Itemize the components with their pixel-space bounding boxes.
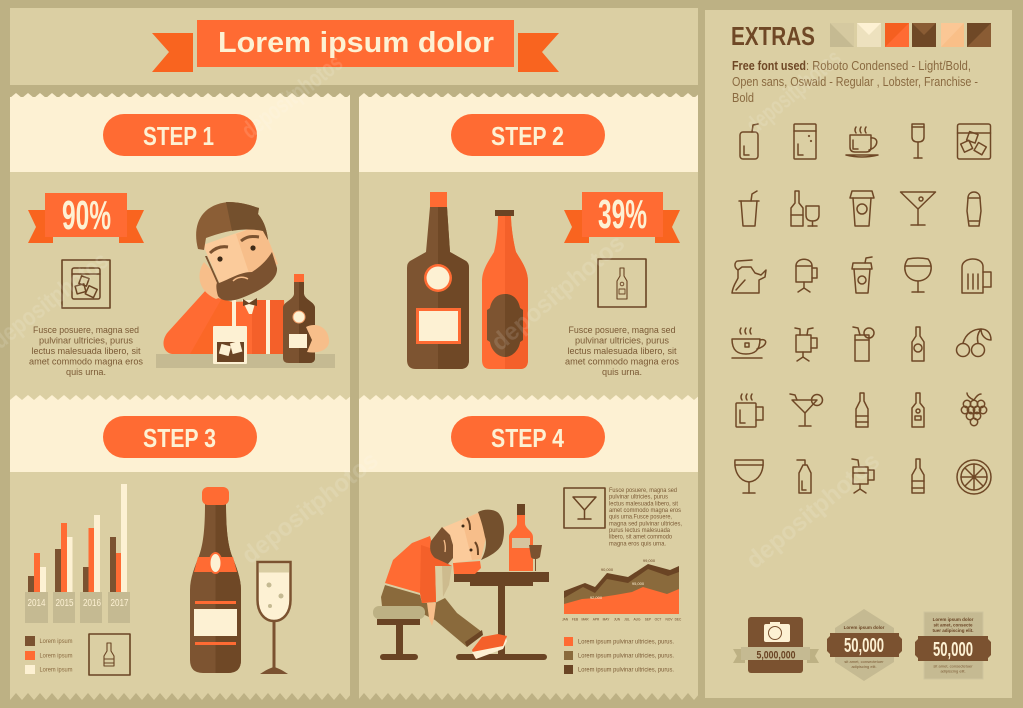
step 1 text block: Fusce posuere, magna sed (33, 325, 139, 335)
icon: beer mug (962, 259, 991, 293)
watermark: depositphotos (236, 446, 384, 570)
39% ribbon (564, 191, 680, 243)
badge: 5,000,000 camera (733, 617, 819, 673)
90% ribbon: 90% (62, 192, 111, 238)
bar chart legend: Lorem ipsum (40, 668, 72, 674)
step 1 text block (29, 325, 143, 377)
area chart legend: Lorem ipsum pulvinar ultricies, purus. (578, 668, 674, 674)
step 4 text block: purus lectus malesuada (609, 528, 671, 534)
step 2 text block (565, 325, 679, 377)
area chart legend: Lorem ipsum pulvinar ultricies, purus. (578, 654, 674, 660)
area chart: 90,000 (601, 567, 614, 572)
step 1 text block: lectus malesuada libero, sit (32, 346, 141, 356)
badge: rectangular 50,000: Lorem ipsum dolor (933, 617, 974, 622)
badge: rectangular 50,000: adipiscing elit. (940, 668, 966, 674)
icon: wine glass (905, 258, 931, 292)
area chart legend: Lorem ipsum pulvinar ultricies, purus. (578, 640, 674, 646)
title banner (152, 20, 559, 72)
font credit text: Open sans, Oswald - Regular , Lobster, Franchise - (732, 75, 978, 89)
badge: rectangular 50,000: tuer adipiscing elit. (932, 628, 974, 633)
area chart: JAN (562, 618, 569, 622)
icon: cocktail with citrus (790, 394, 822, 426)
icon box: martini (564, 488, 605, 528)
bar chart 2014-2017 (25, 484, 130, 623)
step 4 text block: libero, sit amet commodo (609, 535, 673, 541)
icon: beer glass (967, 192, 981, 226)
bar chart 2014-2017: 2014 (28, 598, 46, 609)
badge: rectangular 50,000 (915, 612, 991, 679)
area chart: JUN (614, 618, 621, 622)
illustration: champagne flute (258, 562, 290, 674)
bar chart 2014-2017: 2016 (83, 598, 101, 609)
step 2 heading pill (451, 114, 605, 156)
step 2 text block: pulvinar ultricies, purus (575, 336, 670, 346)
icon: takeaway cup (850, 191, 874, 226)
step 1 text block: amet commodo magna eros (29, 356, 143, 366)
icon box: small bottle (89, 634, 130, 675)
bar chart legend (25, 636, 72, 674)
step 2 text block: Fusce posuere, magna sed (568, 325, 676, 335)
step 4 text block: magna eros quis urna. (609, 541, 666, 547)
area chart legend (564, 637, 674, 674)
area chart: APR (593, 618, 600, 622)
icon: large wine glass (735, 460, 763, 493)
area chart: JUL (624, 618, 630, 622)
step 1 heading pill: STEP 1 (143, 121, 214, 151)
badge: 5,000,000 camera: 5,000,000 (756, 650, 796, 662)
icon: martini (900, 192, 936, 225)
illustration: champagne bottle (190, 487, 241, 673)
icon: bottle (856, 393, 868, 427)
step 1 text block: quis urna. (66, 367, 106, 377)
badge: rectangular 50,000: sit amet, consecte (933, 622, 973, 628)
font credit text: Bold (732, 91, 754, 105)
area chart: OCT (655, 618, 661, 622)
icon: beer bottle (912, 459, 924, 493)
illustration: drunk man at table (373, 504, 549, 660)
step 4 heading pill (451, 416, 605, 458)
icon: can with straw (740, 124, 758, 159)
area chart: NOV (666, 618, 673, 622)
90% ribbon (28, 192, 144, 243)
icon: mug (736, 394, 763, 427)
step 4 text block: lectus malesuada libero, sit (609, 501, 678, 507)
step 1 heading pill (103, 114, 257, 156)
step 4 text block: Fusce posuere, magna sed (609, 488, 677, 494)
title banner: Lorem ipsum dolor (218, 27, 494, 59)
bar chart 2014-2017: 2017 (110, 598, 129, 609)
area chart: MAY (603, 618, 610, 622)
area chart (562, 558, 682, 622)
font credit text (732, 59, 978, 105)
icon box: bottle (598, 259, 646, 307)
icon: tall glass with citrus (853, 327, 874, 361)
icon: takeaway cup with straw (852, 257, 872, 293)
badge: hexagon 50,000: sit amet, consectetuer (844, 659, 884, 664)
icon: bottle and glass (791, 191, 819, 226)
step 2 heading pill: STEP 2 (491, 121, 564, 151)
icon: grapes (961, 393, 987, 426)
area chart: MAR (581, 618, 589, 622)
watermark: depositphotos (741, 44, 847, 140)
39% ribbon: 39% (598, 191, 647, 237)
icon: orange slice (957, 460, 991, 494)
watermark (0, 44, 885, 575)
icon: cocktail mug with straws (795, 328, 817, 361)
icon: irish glass with straw (852, 459, 874, 493)
icon: whisky bottle (912, 327, 924, 361)
watermark: depositphotos (236, 49, 348, 145)
badge: rectangular 50,000: sit amet, consectetuer (933, 664, 973, 668)
icon: irish coffee glass (796, 259, 817, 292)
step 3 heading pill (103, 416, 257, 458)
icon: bottle with straw (797, 460, 811, 493)
badge: hexagon 50,000: adipiscing elit. (851, 664, 877, 669)
bar chart legend: Lorem ipsum (40, 639, 72, 645)
watermark: depositphotos (741, 447, 885, 575)
icon: liquor bottle (912, 393, 924, 427)
icon: whisky on ice (958, 124, 990, 159)
area chart: 99,000 (643, 558, 656, 563)
area chart: 92,000 (590, 595, 603, 600)
icon: soda cup (739, 191, 759, 226)
step 3 heading pill: STEP 3 (143, 423, 216, 453)
badge: hexagon 50,000 (827, 609, 902, 681)
area chart: SEP (645, 618, 651, 622)
badge: hexagon 50,000: 50,000 (844, 635, 884, 657)
step 4 text block (609, 488, 682, 547)
step 1 text block: pulvinar ultricies, purus (39, 336, 134, 346)
watermark: depositphotos (486, 229, 630, 357)
area chart: DEC (675, 618, 682, 622)
icon: tall glass (794, 124, 816, 159)
font credit text: : Roboto Condensed - Light/Bold, (806, 59, 971, 73)
step 4 text block: quis urna.Fusce posuere, (609, 515, 672, 521)
step 4 text block: pulvinar ultricies, purus (609, 495, 668, 501)
step 2 text block: amet commodo magna eros (565, 356, 679, 366)
icon: tea cup (732, 328, 766, 358)
step 4 text block: amet commodo magna eros (609, 508, 681, 514)
colour swatches (830, 23, 991, 47)
icon: kettle (732, 260, 766, 293)
icon: champagne flute (912, 124, 924, 158)
step 2 text block: quis urna. (602, 367, 642, 377)
step 4 heading pill: STEP 4 (491, 423, 564, 453)
badge: hexagon 50,000: Lorem ipsum dolor (844, 625, 885, 630)
area chart: 95,000 (632, 581, 645, 586)
illustration: sad man with bottle and glass (156, 202, 335, 368)
area chart: AUG (634, 618, 641, 622)
badge: rectangular 50,000: 50,000 (933, 639, 973, 661)
icon: cherries (956, 329, 991, 356)
step 4 text block: magna sed pulvinar ultricies, (609, 521, 682, 527)
icon box: whisky glass (62, 260, 110, 308)
icon: coffee cup (846, 127, 878, 157)
illustration: two bottles (407, 192, 528, 369)
extras heading: EXTRAS (731, 21, 815, 51)
step 2 text block: lectus malesuada libero, sit (568, 346, 677, 356)
font credit text: Free font used (732, 59, 806, 73)
bar chart legend: Lorem ipsum (40, 654, 72, 660)
bar chart 2014-2017: 2015 (56, 598, 74, 609)
area chart: FEB (572, 618, 578, 622)
